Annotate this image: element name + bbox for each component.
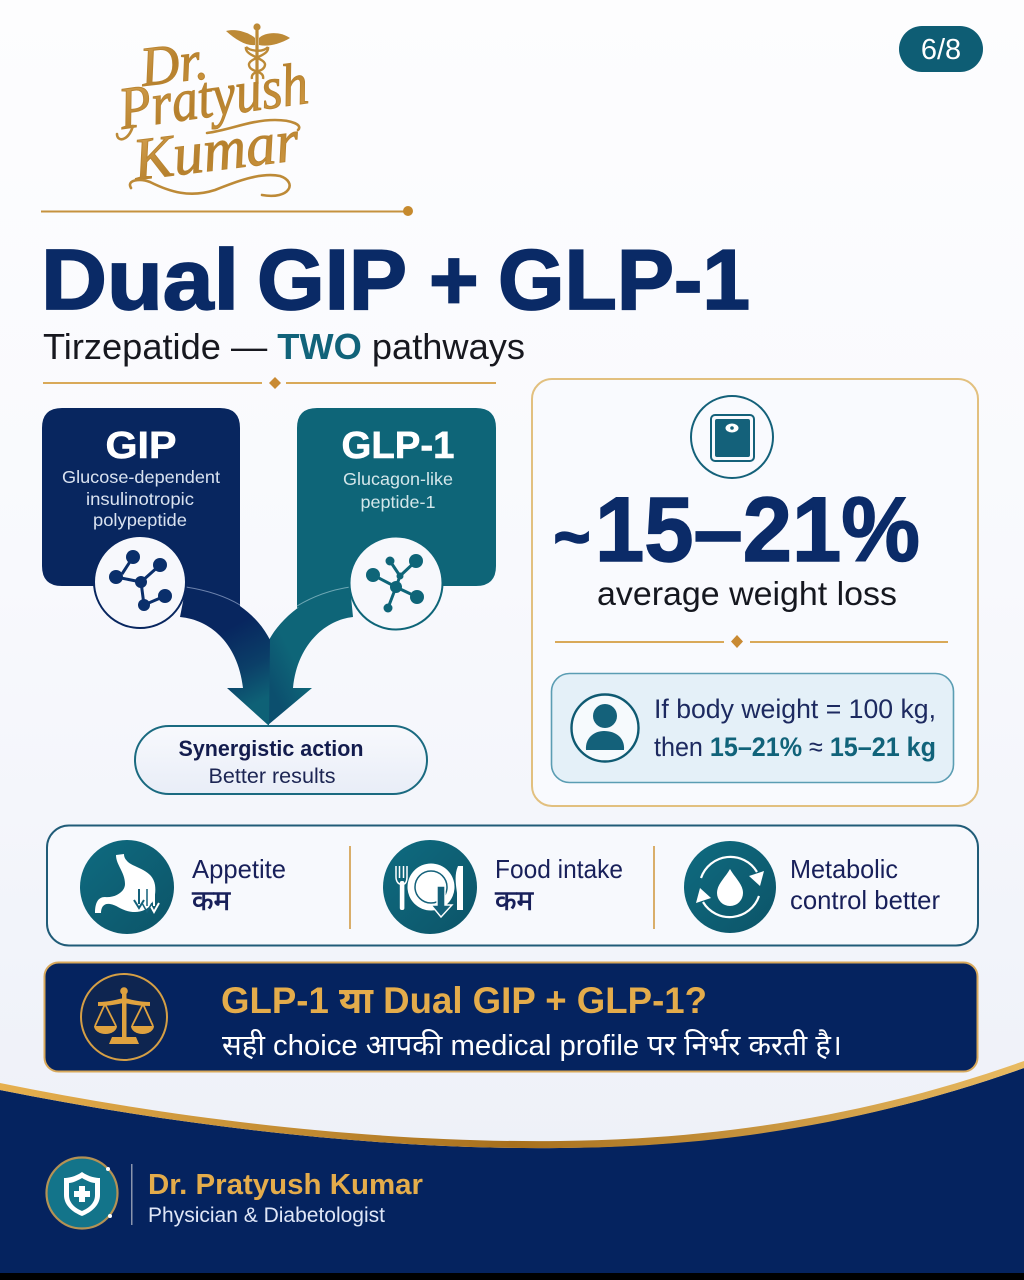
GLP-1 heading: GLP-1	[342, 425, 454, 467]
icon: person	[572, 694, 638, 762]
icon: plate and cutlery	[383, 840, 477, 934]
benefit: food intake	[383, 840, 623, 934]
footer divider	[131, 1164, 132, 1225]
footer role: Physician & Diabetologist	[148, 1204, 385, 1227]
footer identity	[46, 1158, 423, 1228]
GIP heading: GIP	[106, 425, 176, 467]
card: GIP	[42, 408, 240, 606]
badge: page number	[899, 26, 983, 72]
stat: 15-21 percent: ~	[554, 503, 590, 572]
icon: weighing scale	[691, 396, 773, 478]
title	[41, 233, 750, 328]
callout: synergistic action	[135, 726, 427, 794]
stat: 15-21 percent: 15–21%	[595, 479, 920, 581]
callout: example calculation	[552, 674, 954, 782]
logo word: Dr.: Dr.	[136, 29, 211, 99]
logo word: Pratyush: Pratyush	[114, 50, 312, 142]
icon: shield badge	[46, 1158, 118, 1228]
logo underline with dot	[41, 206, 413, 216]
GIP description: insulinotropic	[86, 489, 194, 509]
logo word: Kumar: Kumar	[129, 107, 303, 193]
subtitle divider	[43, 377, 496, 389]
bottom black strip	[0, 1273, 1024, 1280]
appetite text: Appetite	[192, 854, 286, 884]
title: GIP	[257, 233, 407, 328]
logo swashes	[117, 120, 299, 196]
footer name: Dr. Pratyush Kumar	[148, 1169, 423, 1201]
title: Dual	[41, 233, 239, 328]
food intake text: Food intake	[495, 854, 623, 884]
title: +	[429, 233, 479, 328]
banner text: सही choice आपकी medical profile पर निर्भर करती है।	[222, 1029, 842, 1062]
benefit: metabolic control: control better	[790, 885, 940, 915]
panel: weight loss	[532, 379, 978, 806]
subtitle: Tirzepatide — TWO pathways	[43, 326, 525, 367]
GLP-1 description: Glucagon-like	[343, 469, 453, 489]
card: GLP-1	[297, 408, 496, 608]
GLP-1 description	[343, 469, 453, 512]
benefit divider	[653, 846, 655, 929]
icon: metabolic cycle	[684, 841, 776, 933]
GIP description: polypeptide	[93, 510, 187, 530]
banner heading: GLP-1 या Dual GIP + GLP-1?	[221, 980, 707, 1021]
GLP-1 description: peptide-1	[360, 492, 436, 512]
GIP description	[62, 467, 220, 530]
callout: synergistic action: Better results	[208, 765, 336, 788]
metabolic text: Metabolic	[790, 854, 898, 884]
benefit: appetite	[80, 840, 286, 934]
logo: Dr. Pratyush Kumar signature	[114, 23, 312, 196]
GIP description: Glucose-dependent	[62, 467, 220, 487]
panel divider	[555, 635, 948, 648]
benefit: appetite: कम	[192, 885, 232, 916]
icon: caduceus	[226, 23, 290, 84]
benefit divider	[349, 846, 351, 929]
badge: page number: 6/8	[921, 34, 961, 66]
footer band	[0, 1061, 1024, 1280]
benefit: metabolic control	[684, 841, 940, 933]
icon: balance scales	[81, 974, 167, 1060]
panel: pathways diagram	[42, 408, 496, 794]
callout: example calculation: then 15–21% ≈ 15–21 kg	[654, 732, 936, 762]
banner: choice callout	[44, 962, 978, 1072]
icon: GIP molecule	[94, 536, 186, 628]
stat label: average weight loss	[597, 575, 897, 612]
title: GLP-1	[498, 233, 750, 328]
benefit: food intake: कम	[495, 885, 535, 916]
arrow: merging pathways	[180, 586, 353, 725]
icon: GLP-1 molecule	[350, 536, 442, 630]
example text: If body weight = 100 kg,	[654, 694, 936, 724]
panel: benefits strip	[47, 826, 978, 946]
icon: stomach	[80, 840, 174, 934]
callout: synergistic action: Synergistic action	[178, 736, 364, 761]
